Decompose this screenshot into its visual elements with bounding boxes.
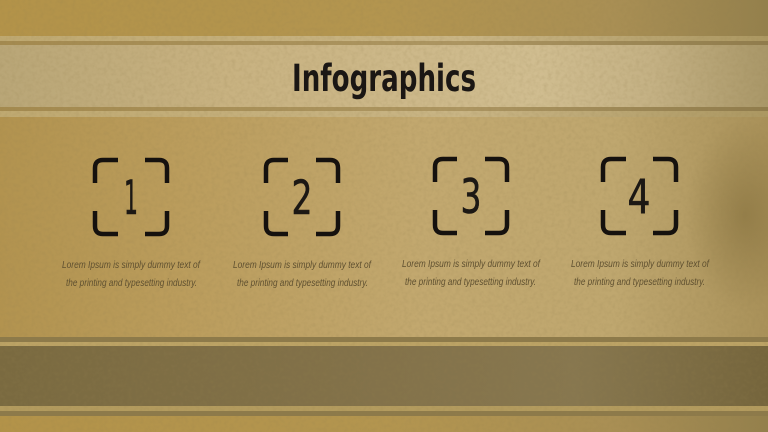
icon: bracket frame 1 [95,160,167,234]
description 4: the printing and typesetting industry. [574,276,705,288]
number 3: 3 [460,170,482,225]
description 3: Lorem Ipsum is simply dummy text of [402,258,541,270]
description 1 [62,259,201,289]
description 2 [233,259,372,289]
number 4: 4 [628,170,650,225]
title: Infographics [292,57,476,100]
description 4 [571,258,710,288]
item 4 [571,159,710,288]
icon: bracket frame 3 [435,159,507,233]
item 2 [233,160,372,289]
description 1: Lorem Ipsum is simply dummy text of [62,259,201,271]
description 2: Lorem Ipsum is simply dummy text of [233,259,372,271]
number 2: 2 [292,171,312,226]
icon: bracket frame 4 [603,159,676,233]
icon: bracket frame 2 [266,160,338,234]
description 1: the printing and typesetting industry. [66,277,197,289]
description 4: Lorem Ipsum is simply dummy text of [571,258,710,270]
item 1 [62,160,201,289]
description 3: the printing and typesetting industry. [405,276,536,288]
description 3 [402,258,541,288]
item 1: 1 [124,171,138,226]
item 3 [402,159,541,288]
description 2: the printing and typesetting industry. [237,277,368,289]
header band [0,36,768,117]
footer band [0,337,768,416]
